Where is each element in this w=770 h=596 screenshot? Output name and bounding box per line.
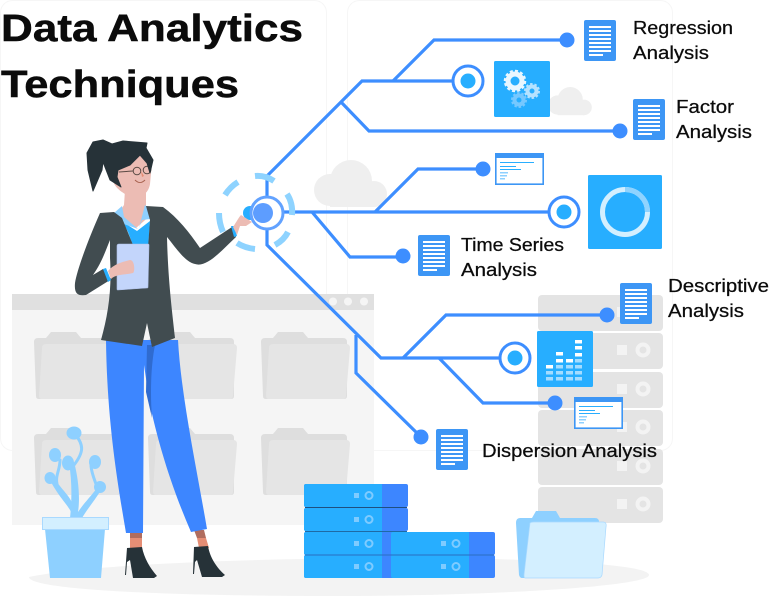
ground shadow bbox=[29, 558, 649, 596]
hub with pulse arcs bbox=[219, 176, 292, 249]
jacket bbox=[75, 206, 236, 347]
icon: bar chart tile bbox=[537, 331, 593, 387]
legs bbox=[106, 340, 209, 548]
labels bbox=[461, 18, 769, 461]
labels: Analysis bbox=[676, 122, 752, 142]
woman bbox=[75, 140, 252, 578]
title: Data Analytics bbox=[1, 8, 303, 50]
holding hand bbox=[108, 260, 134, 279]
labels: Factor bbox=[676, 97, 734, 117]
blue servers bbox=[304, 484, 495, 578]
labels: Dispersion Analysis bbox=[482, 441, 657, 461]
labels: Analysis bbox=[461, 260, 537, 280]
plant in pot bbox=[42, 426, 108, 578]
icon: documents bbox=[418, 20, 665, 470]
clouds bbox=[314, 87, 592, 207]
labels: Time Series bbox=[461, 235, 564, 255]
neck and head bbox=[112, 153, 152, 228]
labels: Descriptive bbox=[668, 276, 769, 296]
icon: gears tile bbox=[494, 61, 550, 117]
icon: donut tile bbox=[588, 175, 662, 249]
server rack: grey bbox=[538, 295, 663, 523]
browser window with folders bbox=[12, 294, 374, 525]
title: Techniques bbox=[1, 64, 239, 106]
title bbox=[1, 8, 303, 106]
arm cuffs bbox=[103, 226, 237, 282]
tablet bbox=[117, 244, 149, 290]
faint background panels bbox=[0, 0, 672, 450]
connector end dots bbox=[396, 32, 628, 444]
shoes bbox=[125, 546, 225, 578]
icon: browser windows bbox=[495, 153, 623, 428]
connector network bbox=[265, 40, 620, 437]
hair bbox=[87, 140, 153, 191]
raised hand bbox=[233, 215, 252, 235]
icon: open folder bbox=[516, 511, 606, 578]
collar and shirt bbox=[114, 205, 158, 264]
labels: Analysis bbox=[668, 301, 744, 321]
labels: Analysis bbox=[633, 43, 709, 63]
labels: Regression bbox=[633, 18, 733, 38]
ring nodes bbox=[453, 66, 579, 373]
